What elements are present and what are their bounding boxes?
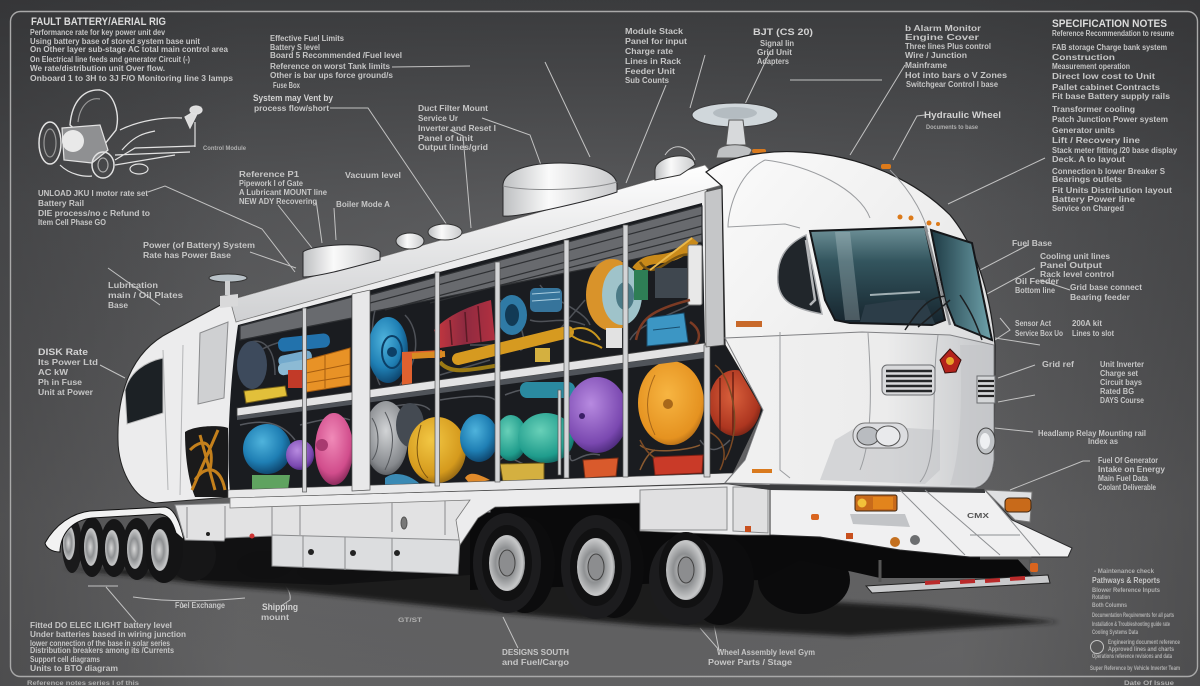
label: bumper light: Intake on Energy	[1098, 465, 1166, 474]
label: antenna	[753, 27, 813, 66]
text block: specification notes: Pallet cabinet Contracts	[1052, 83, 1161, 92]
label: system vent: process flow/short	[254, 104, 329, 113]
label: power distribution: Rate has Power Base	[143, 251, 232, 260]
label: top centre: Module Stack	[625, 27, 684, 36]
label: right side mid: Oil Feeder	[1015, 277, 1059, 286]
side grille	[977, 376, 995, 403]
label: right side mid: Bearing feeder	[1070, 293, 1130, 302]
label: cooling: Battery Rail	[38, 199, 84, 208]
rear fender	[45, 507, 184, 552]
orange ring	[586, 259, 638, 331]
marker lights	[736, 164, 940, 473]
text block: specification notes: Battery Power line	[1052, 195, 1136, 204]
label: centre block	[418, 104, 496, 152]
label: cab upper: Three lines Plus control	[905, 42, 991, 51]
rear wheels	[62, 517, 216, 583]
label: system vent: System may Vent by	[253, 93, 333, 103]
wipers	[905, 295, 982, 340]
text block: bottom left: Distribution breakers among its /Currents	[30, 646, 174, 655]
label: system vent	[253, 93, 333, 113]
label: bumper light: Coolant Deliverable	[1098, 483, 1156, 492]
label: left cap: main / Oil Plates	[108, 291, 184, 300]
label: bumper light: Fuel Of Generator	[1098, 456, 1158, 465]
blue tank upper	[368, 317, 408, 383]
label: hydraulic wiper: Hydraulic Wheel	[924, 110, 1001, 120]
label: cab upper: b Alarm Monitor	[905, 24, 981, 33]
cargo bay floor	[228, 473, 735, 498]
label: left mid: DISK Rate	[38, 347, 88, 357]
text block: bottom right notes: - Maintenance check	[1094, 568, 1154, 575]
lower bay components	[243, 361, 761, 490]
red pot right	[653, 455, 703, 475]
label: cooling: Item Cell Phase GO	[38, 218, 106, 227]
upper bay wiring backdrop	[245, 285, 695, 385]
text block: bottom left: Support cell diagrams	[30, 655, 100, 664]
label: cooling: DIE process/no c Refund to	[38, 209, 150, 218]
label: top centre	[625, 27, 687, 85]
label: top centre left: Board 5 Recommended /Fuel level	[270, 51, 402, 60]
red pot	[583, 458, 618, 478]
label: right side upper: Panel Output	[1040, 261, 1102, 270]
label: headlamp	[1038, 429, 1146, 446]
label: top centre: Panel for input	[625, 37, 687, 46]
label: centre block: Inverter and Reset I	[418, 124, 496, 133]
lower bay wiring backdrop	[240, 355, 730, 470]
ground shadow	[62, 568, 1060, 636]
label: hydraulic	[239, 170, 328, 206]
chassis boxes	[175, 495, 490, 574]
label: right side grille: Grid ref	[1042, 360, 1074, 369]
trailer roof band	[230, 165, 722, 322]
label: right side mid: Bottom line	[1015, 286, 1055, 295]
text block: bottom left: Fitted DO ELEC ILIGHT battery level	[30, 621, 172, 630]
label: cab upper: Mainframe	[905, 61, 948, 70]
rear underrun bar	[866, 558, 1050, 593]
vertical pillars	[302, 188, 724, 492]
label: antenna: Adapters	[757, 57, 789, 66]
main wheels	[473, 513, 754, 625]
text block: specification notes: SPECIFICATION NOTES	[1052, 18, 1167, 30]
text block: top left heading: We rate/distribution unit Over flow.	[30, 64, 165, 73]
label: left mid: Unit at Power	[38, 388, 93, 397]
label: shipping: Shipping	[262, 602, 298, 612]
front bumper: CMX	[967, 513, 989, 520]
label: right side windscreen: 200A kit	[1072, 319, 1102, 328]
text block: top left heading: FAULT BATTERY/AERIAL RIG	[31, 16, 166, 28]
text block: specification notes: Construction	[1052, 53, 1115, 62]
text block: specification notes: FAB storage Charge bank system	[1052, 43, 1167, 52]
label: design south	[502, 648, 569, 667]
shelf	[237, 343, 705, 420]
small roof antenna	[209, 274, 247, 308]
text block: bottom left	[30, 621, 186, 673]
label: hydraulic: Pipework I of Gate	[239, 179, 304, 188]
label: cab upper: Engine Cover	[905, 33, 979, 42]
label: right side mid	[1015, 277, 1142, 302]
label: right side grille: Unit Inverter	[1100, 360, 1144, 369]
label: right side grille: Circuit bays	[1100, 378, 1143, 387]
maroon cylinder	[434, 300, 495, 348]
text block: top left heading: Using battery base of stored system base unit	[30, 37, 200, 46]
label: wheel note: Power Parts / Stage	[708, 658, 793, 667]
text block: specification notes	[1052, 18, 1178, 213]
label: centre block: Duct Filter Mount	[418, 104, 488, 113]
orange drum	[709, 370, 761, 436]
label: centre block: Panel of unit	[418, 134, 473, 143]
label: bumper light	[1098, 456, 1166, 492]
label: top centre: Charge rate	[625, 47, 674, 56]
label: right side upper: Fuel Base	[1012, 239, 1053, 248]
ceiling ribs	[240, 206, 702, 340]
cab shell	[706, 152, 995, 488]
text block: specification notes: Lift / Recovery line	[1052, 136, 1141, 145]
body shading	[820, 425, 940, 484]
text block: top left heading: On Electrical line feeds and generator Circuit (-)	[30, 55, 190, 64]
text block: specification notes: Fit Units Distribution layout	[1052, 186, 1172, 195]
label: cab upper: Switchgear Control I base	[906, 80, 999, 89]
orange coil	[636, 240, 695, 270]
label: gt/st: GT/ST	[398, 617, 422, 624]
label: cooling	[38, 189, 150, 227]
label: top centre: Sub Counts	[625, 76, 670, 85]
text block: bottom left: lower connection of the base in solar series	[30, 639, 170, 648]
label: left mid: Ph in Fuse	[38, 378, 83, 387]
text block: bottom right notes: Rotation	[1092, 594, 1110, 601]
right windshield	[931, 230, 992, 340]
label: right side windscreen	[1015, 319, 1114, 338]
label: design south: and Fuel/Cargo	[502, 658, 569, 667]
orange crate	[288, 348, 350, 392]
label: headlamp: Headlamp Relay Mounting rail	[1038, 429, 1146, 438]
label: cooling: UNLOAD JKU I motor rate set	[38, 189, 148, 198]
roof tanks	[303, 147, 695, 277]
text block: bottom right notes	[1090, 568, 1180, 672]
upper bay components	[237, 238, 702, 403]
green/dark parts	[634, 270, 648, 300]
icon: engine schematic	[39, 90, 202, 178]
text block: bottom right notes: Approved lines and charts	[1108, 646, 1174, 653]
text block: specification notes: Measurement operation	[1052, 62, 1130, 71]
label: power distribution: Power (of Battery) System	[143, 241, 255, 250]
text block: top left heading: Performance rate for key power unit dev	[30, 28, 165, 37]
label: hydraulic wiper	[924, 110, 1001, 131]
label: right side grille: Rated BG	[1100, 387, 1134, 396]
label: power distribution	[143, 241, 255, 260]
label: cab upper: Hot into bars o V Zones	[905, 71, 1008, 80]
cargo bay interior	[228, 203, 763, 492]
label: top centre left: Reference on worst Tank limits	[270, 62, 391, 71]
label: left cap: Base	[108, 301, 129, 310]
label: right side windscreen: Sensor Act	[1015, 319, 1051, 328]
label: wheel note	[708, 648, 815, 667]
label: right side upper: Cooling unit lines	[1040, 252, 1111, 261]
seams	[728, 160, 938, 482]
text block: top left heading: Onboard 1 to 3H to 3J F/O Monitoring line 3 lamps	[30, 74, 234, 83]
label: shipping: mount	[261, 613, 289, 622]
text block: top left heading: On Other layer sub-stage AC total main control area	[30, 45, 229, 54]
orange box and pipe	[402, 350, 442, 385]
label: antenna: BJT (CS 20)	[753, 27, 813, 37]
label: design south: DESIGNS SOUTH	[502, 648, 569, 657]
label: pressure: Vacuum level	[345, 171, 401, 180]
label: top centre left: Battery S level	[270, 43, 320, 52]
text block: specification notes: Generator units	[1052, 126, 1116, 135]
text block: top left heading	[30, 16, 234, 83]
blue box	[647, 313, 688, 346]
text block: specification notes: Fit base Battery supply rails	[1052, 92, 1171, 101]
label: antenna: Signal lin	[760, 39, 794, 48]
white junction box	[688, 245, 702, 305]
text block: specification notes: Patch Junction Power system	[1052, 115, 1168, 124]
text block: specification notes: Bearings outlets	[1052, 175, 1123, 184]
label: engine part: Control Module	[203, 145, 246, 152]
label: left cap	[108, 281, 184, 310]
leader lines	[88, 52, 1090, 650]
trailer body	[118, 165, 730, 503]
text block: bottom right notes: Pathways & Reports	[1092, 576, 1160, 585]
label: boiler: Boiler Mode A	[336, 200, 390, 209]
side window	[778, 235, 822, 314]
label: right side mid: Grid base connect	[1070, 283, 1142, 292]
truck	[45, 103, 1072, 625]
trailer left cap details	[125, 322, 228, 497]
blue gear	[497, 295, 527, 335]
label: right side grille: DAYS Course	[1100, 396, 1144, 405]
label: right side upper: Rack level control	[1040, 270, 1114, 279]
label: left mid: Its Power Ltd	[38, 358, 98, 367]
label: centre block: Service Ur	[418, 114, 458, 123]
text block: specification notes: Service on Charged	[1052, 204, 1124, 213]
text block: specification notes: Deck. A to layout	[1052, 155, 1125, 164]
label: hydraulic: Reference P1	[239, 170, 300, 179]
text block: bottom left: Under batteries based in wiring junction	[30, 630, 186, 639]
label: top centre: Lines in Rack	[625, 57, 682, 66]
text block: specification notes: Direct low cost to Unit	[1052, 72, 1155, 81]
text block: bottom right notes: Cooling Systems Data	[1092, 629, 1138, 636]
yellow tray	[500, 463, 544, 482]
label: bumper light: Main Fuel Data	[1098, 474, 1148, 483]
label: headlamp: Index as	[1088, 437, 1119, 446]
front grille	[882, 365, 935, 395]
label: top centre left: Other is bar ups force ground/s	[270, 71, 394, 80]
far-side black wheel and undercarriage	[190, 500, 1035, 614]
label: fuel cell: Fuel Exchange	[175, 601, 225, 610]
label: right side windscreen: Lines to slot	[1072, 329, 1114, 338]
cab	[706, 152, 995, 488]
label: hydraulic wiper: Documents to base	[926, 124, 978, 131]
label: top centre: Feeder Unit	[625, 67, 675, 76]
text block: specification notes: Transformer cooling	[1052, 105, 1135, 114]
emblem	[940, 349, 961, 373]
label: left cap: Lubrication	[108, 281, 158, 290]
label: left mid	[38, 347, 98, 397]
label: top centre left: Fuse Box	[273, 81, 300, 90]
satellite dish	[692, 103, 778, 158]
label: left mid: AC kW	[38, 368, 69, 377]
label: top centre left	[270, 34, 402, 90]
text block: bottom right notes: Blower Reference Inputs	[1092, 587, 1160, 594]
label: antenna: Grid Unit	[757, 48, 792, 57]
text block: specification notes: Connection b lower Breaker S	[1052, 167, 1166, 176]
label: right side upper	[1012, 239, 1114, 279]
label: hydraulic: NEW ADY Recovering	[239, 197, 317, 206]
label: hydraulic: A Lubricant MOUNT line	[239, 188, 328, 197]
headlights	[853, 423, 995, 454]
label: centre block: Output lines/grid	[418, 143, 488, 152]
front bumper	[725, 484, 1072, 557]
label: shipping	[261, 602, 298, 622]
label: right side grille	[1042, 360, 1144, 405]
text block: bottom left: Units to BTO diagram	[30, 664, 118, 673]
label: right side windscreen: Service Box Uo	[1015, 329, 1063, 338]
label: right side grille: Charge set	[1100, 369, 1138, 378]
fender arch and side rail	[230, 481, 770, 545]
label: top centre left: Effective Fuel Limits	[270, 34, 345, 43]
yellow box	[244, 386, 287, 403]
label: cab upper: Wire / Junction	[905, 51, 967, 60]
windshield	[810, 227, 945, 325]
text block: specification notes: Stack meter fitting /20 base display	[1052, 146, 1178, 155]
text block: bottom right notes: Both Columns	[1092, 602, 1127, 609]
label: cab upper	[905, 24, 1008, 89]
label: wheel note: Wheel Assembly level Gym	[717, 648, 815, 657]
text block: specification notes: Reference Recommendation to resume	[1052, 29, 1174, 38]
